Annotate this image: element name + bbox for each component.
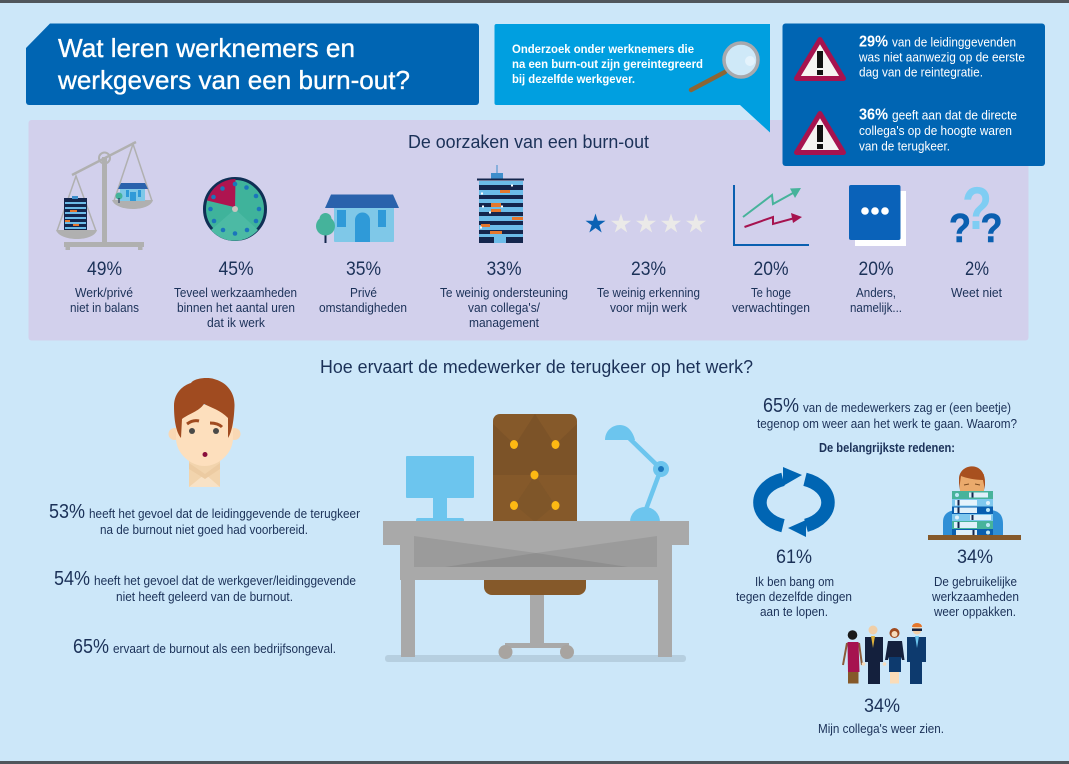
- callout: research description: bij dezelfde werkgever.: [512, 74, 635, 86]
- icon: house: [316, 194, 399, 243]
- cause: other: [849, 185, 906, 315]
- title banner: werkgevers van een burn-out?: [57, 65, 410, 95]
- icon: line chart with arrows: [734, 185, 809, 245]
- text: 54 percent: [54, 568, 356, 604]
- cause: don't know: Weet niet: [951, 286, 1003, 300]
- cause: too much work: binnen het aantal uren: [177, 301, 295, 315]
- text: 53 percent: heeft het gevoel dat de leidinggevende de terugkeer: [89, 507, 360, 521]
- reason: seeing colleagues: 34%: [864, 696, 900, 717]
- office chair: [484, 414, 586, 659]
- reason: seeing colleagues: Mijn collega's weer zien.: [818, 722, 944, 736]
- callout: research description: Onderzoek onder werknemers die: [512, 44, 694, 56]
- reason: picking up work again: 34%: [957, 547, 993, 568]
- cause: private circumstances: omstandigheden: [319, 301, 407, 315]
- cause: too little recognition: [586, 214, 706, 315]
- reason: same problems: aan te lopen.: [760, 605, 828, 619]
- reason: picking up work again: weer oppakken.: [933, 605, 1016, 619]
- cause: too much work: [174, 178, 297, 330]
- reason: same problems: Ik ben bang om: [755, 575, 834, 589]
- cause: work/private balance: Werk/privé: [75, 286, 133, 300]
- reason: picking up work again: [928, 466, 1021, 619]
- cause: work/private balance: niet in balans: [70, 301, 139, 315]
- text: 36 percent: [859, 106, 1017, 154]
- reason: same problems: 61%: [776, 547, 812, 568]
- icon: clock: [204, 178, 266, 241]
- reason: same problems: tegen dezelfde dingen: [736, 590, 852, 604]
- monitor: [406, 456, 474, 522]
- cause: too little recognition: Te weinig erkenning: [597, 286, 700, 300]
- cause: too high expectations: Te hoge: [751, 286, 791, 300]
- cause: too much work: 45%: [218, 259, 254, 280]
- text: 29 percent: dag van de reintegratie.: [859, 66, 983, 80]
- text: 54 percent: heeft het gevoel dat de werkgever/leidinggevende: [94, 574, 356, 588]
- reason: same problems: [736, 467, 852, 619]
- heading: return to work: Hoe ervaart de medewerker de terugkeer op het werk?: [320, 357, 753, 377]
- text: 65 percent dreaded returning: tegenop om weer aan het werk te gaan. Waarom?: [757, 417, 1017, 431]
- reason: picking up work again: De gebruikelijke: [934, 575, 1017, 589]
- text: 65 percent: ervaart de burnout als een bedrijfsongeval.: [113, 642, 336, 656]
- cause: too little support: van collega's/: [468, 301, 540, 315]
- icon: worried face: [168, 378, 240, 487]
- cause: too little support: Te weinig ondersteuning: [440, 286, 568, 300]
- text: 65 percent dreaded returning: van de medewerkers zag er (een beetje): [803, 401, 1011, 415]
- icon: office building: [477, 165, 524, 243]
- cause: don't know: [949, 175, 1003, 300]
- text: 54 percent: niet heeft geleerd van de burnout.: [116, 590, 293, 604]
- cause: too little support: 33%: [486, 259, 522, 280]
- cause: private circumstances: Privé: [350, 286, 377, 300]
- cause: don't know: 2%: [965, 259, 989, 280]
- icon: question marks: ?: [980, 205, 1002, 251]
- cause: too little support: [440, 165, 568, 330]
- reason: seeing colleagues: [818, 623, 944, 736]
- text: 65 percent dreaded returning: 65%: [763, 395, 799, 417]
- icon: warning triangle 1: [796, 40, 844, 78]
- text: 29 percent: was niet aanwezig op de eerste: [858, 50, 1025, 64]
- cause: work/private balance: [56, 142, 153, 315]
- icon: four colleagues: [843, 623, 926, 684]
- text: 29 percent: 29%: [859, 34, 888, 50]
- icon: rating stars: [586, 214, 706, 232]
- cause: other: namelijk...: [850, 301, 902, 315]
- cause: too much work: Teveel werkzaamheden: [174, 286, 297, 300]
- text: 65 percent dreaded returning: [757, 395, 1017, 431]
- cause: too much work: dat ik werk: [207, 316, 266, 330]
- text: 53 percent: na de burnout niet goed had voorbereid.: [100, 523, 308, 537]
- icon: speech square with dots: [849, 185, 906, 246]
- text: 36 percent: collega's op de hoogte waren: [859, 124, 1012, 138]
- text: 53 percent: [49, 501, 360, 537]
- cause: too high expectations: 20%: [754, 259, 789, 280]
- cause: private circumstances: 35%: [346, 259, 381, 280]
- cause: private circumstances: [316, 194, 407, 315]
- desk: [383, 521, 689, 657]
- text: 65 percent: [73, 636, 336, 658]
- text: 36 percent: van de terugkeer.: [859, 140, 950, 154]
- cause: work/private balance: 49%: [87, 259, 122, 280]
- cause: too little recognition: 23%: [631, 259, 666, 280]
- illustration: desk with chair, monitor and lamp: [383, 414, 689, 662]
- cause: other: 20%: [858, 259, 894, 280]
- icon: question marks: ?: [949, 205, 971, 251]
- panel: employer warnings: [782, 24, 1045, 166]
- text: 36 percent: 36%: [859, 106, 888, 124]
- cause: too high expectations: [732, 185, 810, 315]
- text: 29 percent: [858, 34, 1025, 80]
- icon: cycle arrows: [760, 467, 828, 537]
- text: 54 percent: 54%: [54, 568, 90, 590]
- icon: question marks: ?: [962, 175, 992, 242]
- floor shadow: [385, 655, 686, 662]
- desk lamp: [605, 425, 669, 522]
- panel: causes background: [28, 120, 1028, 340]
- icon: magnifying glass: [691, 43, 758, 90]
- text: 65 percent: 65%: [73, 636, 109, 658]
- reason: picking up work again: werkzaamheden: [931, 590, 1019, 604]
- callout: research description: [494, 24, 770, 132]
- cause: other: Anders,: [856, 286, 896, 300]
- subheading: main reasons: De belangrijkste redenen:: [819, 441, 955, 455]
- icon: balance scale: [56, 142, 153, 250]
- heading: causes: De oorzaken van een burn-out: [408, 132, 649, 152]
- icon: question marks: [949, 175, 1002, 251]
- icon: warning triangle 2: [796, 114, 844, 152]
- callout: research description: na een burn-out zijn gereintegreerd: [512, 59, 703, 71]
- title banner: Wat leren werknemers en: [58, 33, 355, 63]
- text: 36 percent: geeft aan dat de directe: [892, 108, 1017, 122]
- icon: person behind binders: [928, 466, 1021, 540]
- text: 53 percent: 53%: [49, 501, 85, 523]
- cause: too little support: management: [469, 316, 539, 330]
- text: 29 percent: van de leidinggevenden: [892, 36, 1016, 50]
- title banner: [26, 24, 479, 105]
- cause: too high expectations: verwachtingen: [732, 301, 810, 315]
- cause: too little recognition: voor mijn werk: [610, 301, 688, 315]
